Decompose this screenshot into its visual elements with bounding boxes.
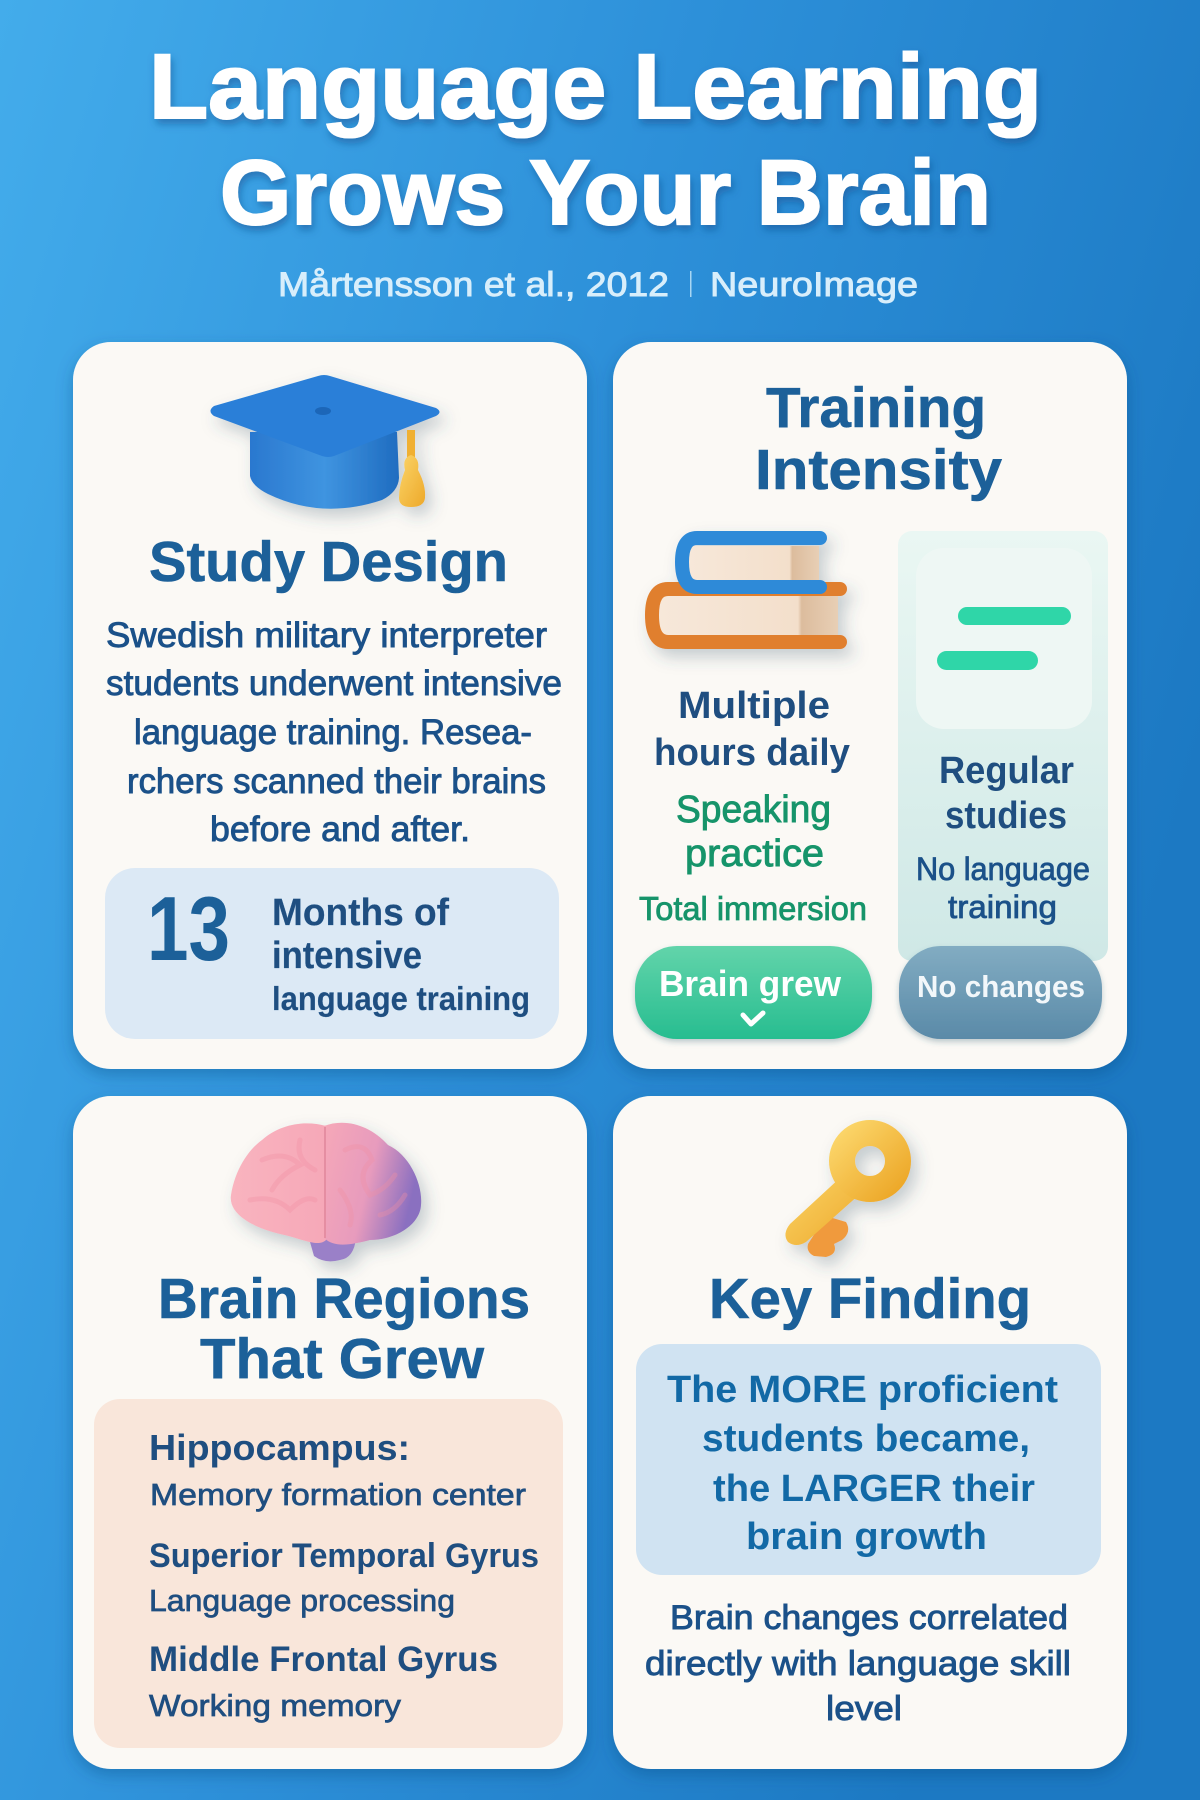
callout: finding statement: students became, [702,1418,1030,1460]
title: Language Learning [149,36,1042,138]
panel: key finding [613,1096,1127,1769]
panel: brain regions [73,1096,587,1769]
callout: 13 months [105,868,559,1039]
column: right panel: Regular [939,750,1074,792]
callout: finding statement: The MORE proficient [667,1369,1058,1411]
column: right panel [898,531,1108,961]
list: regions: Language processing [149,1583,455,1618]
callout: finding statement: brain growth [746,1516,987,1558]
list: regions: Working memory [149,1688,402,1723]
column: right panel: studies [945,795,1067,837]
button: no changes: No changes [917,969,1085,1004]
callout: finding statement: the LARGER their [713,1468,1035,1510]
text: correlation note: level [826,1690,902,1728]
heading: brain regions: That Grew [200,1327,485,1391]
column: left text [639,685,867,927]
button: no changes [899,946,1102,1039]
list: regions [94,1399,563,1748]
list: regions: Superior Temporal Gyrus [149,1537,539,1575]
callout: finding statement [636,1344,1101,1575]
icon: brain [231,1123,421,1261]
text: study description: students underwent intensive [106,664,562,703]
text: study description: Swedish military interpreter [106,616,547,655]
column: left text: Total immersion [639,890,867,927]
column: left text: Speaking [676,789,831,831]
callout: 13 months: Months of [272,892,449,934]
panel: study design [73,342,587,1069]
text: study description: language training. Resea- [134,713,532,752]
heading: training intensity: Intensity [755,438,1002,502]
icon: check mark [743,1013,763,1024]
icon: key [785,1133,898,1257]
heading: training intensity: Training [766,376,986,440]
subtitle [278,266,918,304]
column: left text: practice [685,833,824,875]
subtitle: Mårtensson et al., 2012 [278,266,669,304]
text: correlation note: Brain changes correlated [670,1599,1068,1637]
column: right panel: training [948,889,1057,925]
button: brain grew [635,946,872,1039]
column: left text: hours daily [654,732,850,774]
icon: graduation cap [210,375,440,509]
title [149,36,1042,244]
icon: short lines [916,548,1092,729]
panel: training intensity [613,342,1127,1069]
icon: stack of books [652,538,840,642]
text: study description: before and after. [210,810,470,849]
text: study description: rchers scanned their brains [127,762,546,801]
column: right panel: No language [916,851,1090,887]
heading: study design: Study Design [149,530,508,594]
heading: brain regions: Brain Regions [158,1267,530,1331]
subtitle: NeuroImage [710,266,918,304]
callout: 13 months: language training [272,980,530,1017]
heading: training intensity [755,376,1002,502]
heading: brain regions [158,1267,530,1391]
list: regions: Memory formation center [150,1477,526,1512]
callout: 13 months: intensive [272,935,422,977]
list: regions: Middle Frontal Gyrus [149,1640,498,1679]
title: Grows Your Brain [220,142,991,244]
column: left text: Multiple [678,685,830,727]
list: regions: Hippocampus: [149,1427,410,1468]
text: correlation note: directly with language skill [645,1645,1071,1683]
text: study description [106,616,562,849]
text: correlation note [645,1599,1071,1728]
callout: 13 months: 13 [147,879,230,980]
heading: key finding: Key Finding [709,1267,1031,1331]
button: brain grew: Brain grew [659,963,842,1004]
